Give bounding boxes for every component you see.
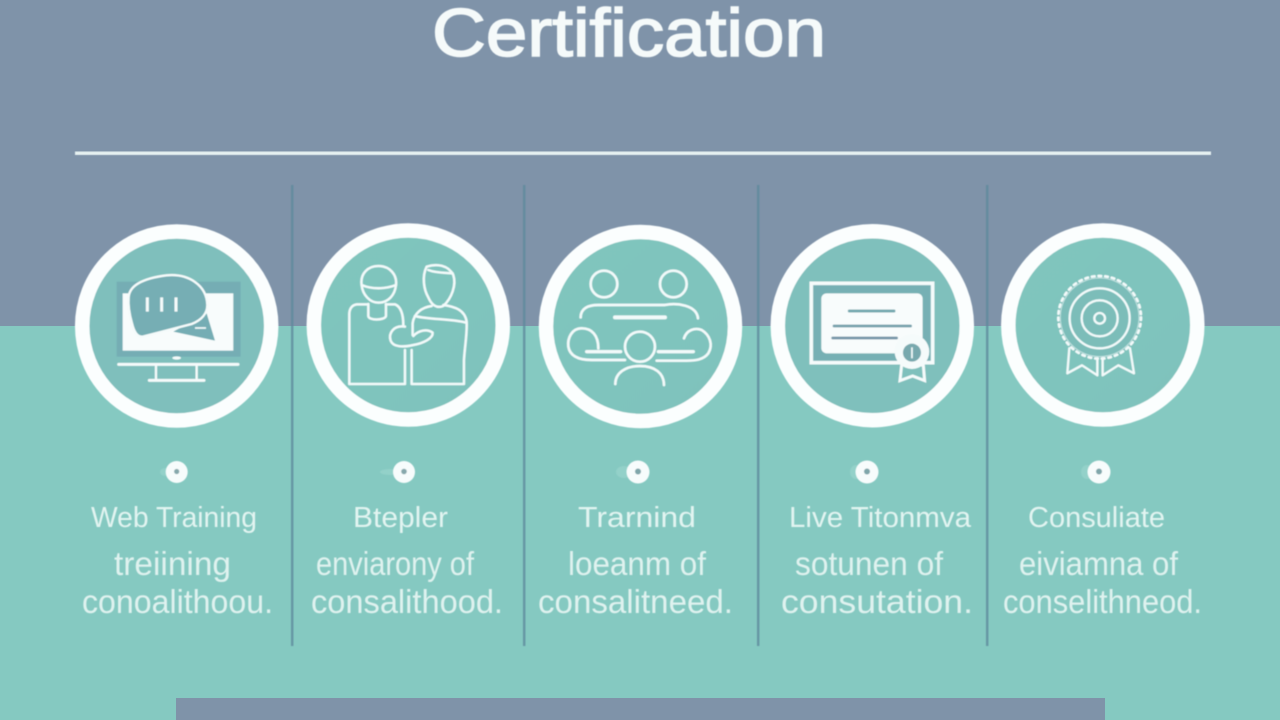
label: stepler: consalithood. xyxy=(311,583,503,620)
status dot xyxy=(380,461,415,483)
status dot xyxy=(850,460,878,484)
label: training: loeanm of xyxy=(568,545,707,582)
icon ring: monitor xyxy=(82,232,271,420)
label: training xyxy=(538,502,733,620)
panel: consultation badge xyxy=(1003,230,1202,620)
label: consultate: conselithneod. xyxy=(1003,583,1202,620)
background: lower teal band xyxy=(0,326,1280,720)
label: web training: treiining xyxy=(114,545,231,582)
label: live training: Live Titonmva xyxy=(789,502,972,534)
label: training: consalitneed. xyxy=(538,583,733,620)
label: live training: consutation. xyxy=(781,583,973,620)
status dot xyxy=(160,461,188,483)
label: consultate xyxy=(1003,502,1202,620)
label: stepler: enviarony of xyxy=(316,545,475,582)
panel: web training xyxy=(82,232,273,620)
icon ring: certificate xyxy=(778,231,967,420)
label: consultate: Consuliate xyxy=(1028,502,1165,534)
label: live training: sotunen of xyxy=(795,545,944,582)
label: live training xyxy=(781,502,973,620)
label: stepler: Btepler xyxy=(353,502,448,534)
horizontal rule xyxy=(75,152,1211,155)
panel: two people xyxy=(311,230,503,620)
icon ring: group xyxy=(546,232,735,421)
label: training: Trarnind xyxy=(578,502,696,534)
status dot xyxy=(1081,460,1110,484)
column dividers xyxy=(291,185,988,646)
icon ring: badge xyxy=(1008,230,1197,420)
icon: rosette badge xyxy=(1058,276,1141,375)
label: web training xyxy=(82,502,273,620)
status dot xyxy=(616,460,650,484)
icon: certificate with seal xyxy=(811,283,933,381)
icon: two people shaking hands xyxy=(349,265,467,384)
label: web training: Web Training xyxy=(91,502,257,534)
icon: people around a table xyxy=(568,271,711,385)
icon: monitor with speech bubble xyxy=(117,275,241,380)
label: stepler xyxy=(311,502,503,620)
bottom bar xyxy=(176,698,1105,720)
panel: certificate xyxy=(778,231,973,620)
panel: training group xyxy=(538,232,735,620)
label: consultate: eiviamna of xyxy=(1019,545,1179,582)
label: web training: conoalithoou. xyxy=(82,583,273,620)
icon ring: people xyxy=(314,230,503,420)
background: upper slate band xyxy=(0,0,1280,326)
